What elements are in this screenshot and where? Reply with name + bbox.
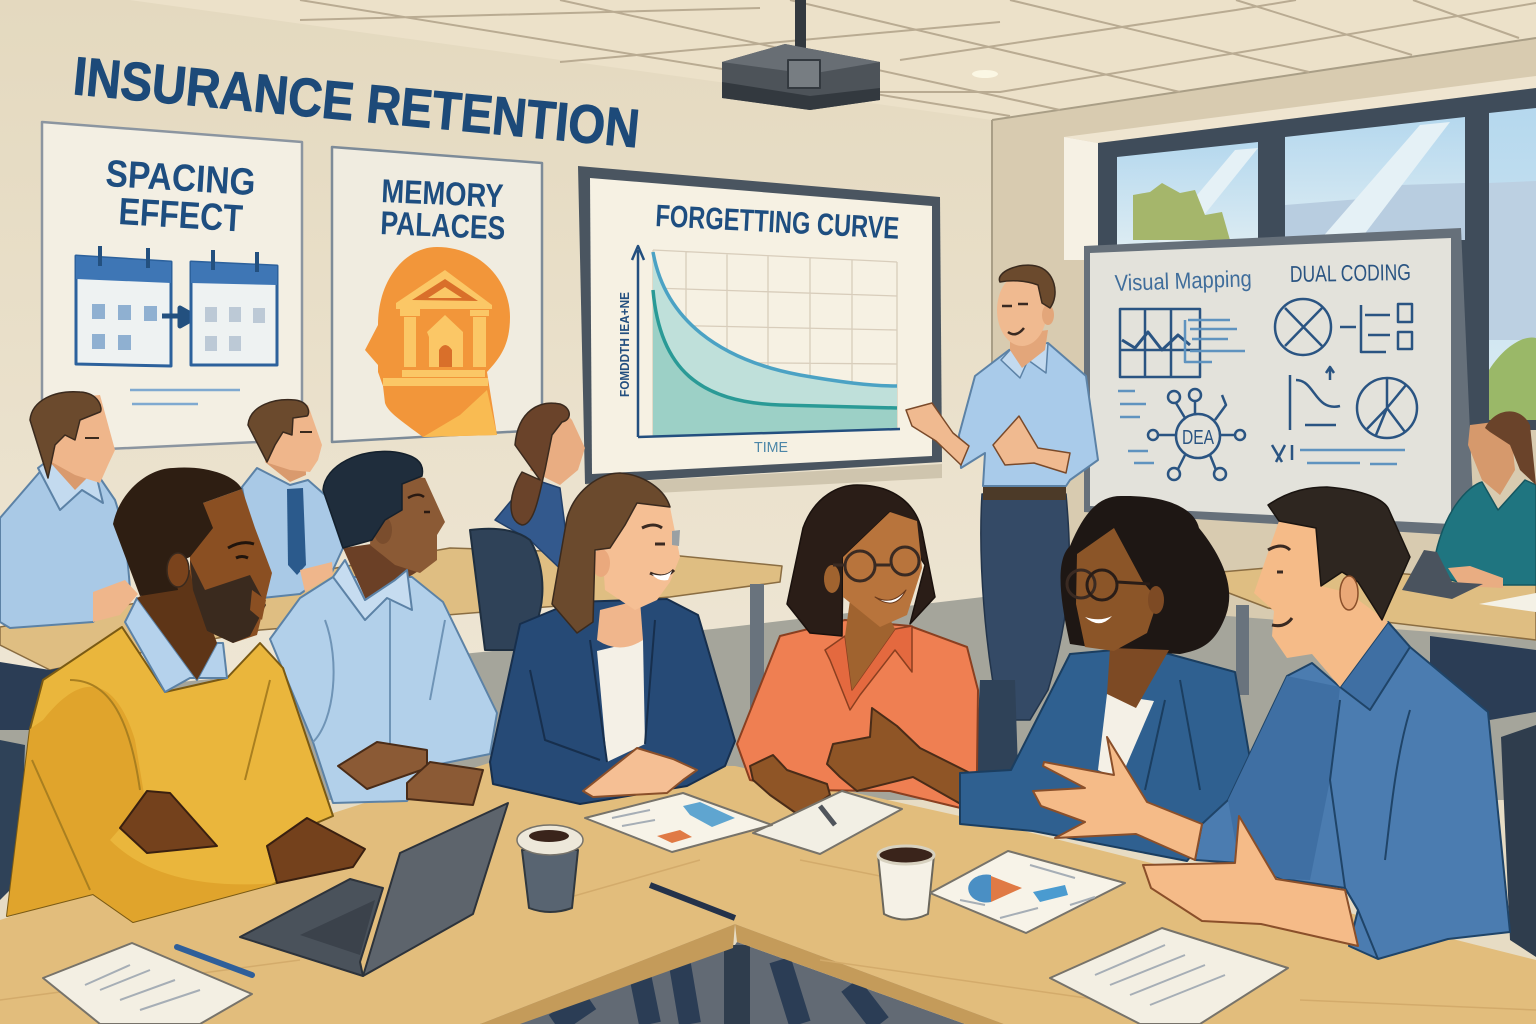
pen near paper	[177, 947, 252, 975]
collar	[1001, 343, 1048, 378]
caption lines	[130, 390, 240, 404]
heading: memory palaces: MEMORY	[381, 172, 504, 214]
poster: spacing effect	[42, 122, 302, 452]
heading: memory palaces: PALACES	[380, 204, 506, 246]
arrow between calendars	[162, 308, 196, 326]
x axis label: TIME	[754, 439, 788, 456]
document: centre chart	[585, 793, 772, 852]
heading: dual coding: DUAL CODING	[1290, 259, 1411, 287]
head	[1010, 330, 1048, 368]
sketches	[1118, 299, 1417, 480]
face	[1002, 304, 1028, 334]
neck	[137, 570, 217, 680]
person: woman in navy blazer	[490, 473, 735, 804]
ceiling light	[972, 70, 998, 78]
text on whiteboard: DEA	[1182, 427, 1215, 449]
person: man in light blue shirt	[270, 451, 497, 805]
heading: spacing effect: SPACING	[104, 153, 257, 204]
poster: memory palaces	[332, 147, 542, 442]
heading: forgetting curve: FORGETTING CURVE	[655, 198, 900, 246]
shirt	[1195, 622, 1510, 959]
belt	[983, 486, 1066, 500]
pen on table	[650, 885, 735, 918]
person: man in yellow sweater	[7, 467, 365, 922]
chart: forgetting curve	[617, 246, 900, 456]
collar	[1340, 622, 1410, 710]
heading: visual mapping: Visual Mapping	[1114, 265, 1252, 296]
coffee cup right	[878, 846, 934, 920]
heading: spacing effect	[104, 153, 257, 241]
foreground tables	[0, 762, 1536, 1024]
heading: memory palaces	[380, 172, 506, 246]
person: woman in blue blazer with curly hair	[960, 496, 1250, 861]
hands	[906, 403, 969, 465]
crossed hands	[120, 791, 217, 853]
paper on back right table	[1479, 593, 1536, 612]
projection screen	[578, 166, 942, 496]
icon: calendar one	[76, 246, 171, 366]
laptop on back right table	[1402, 550, 1483, 599]
window	[1098, 88, 1536, 430]
person: back row man left	[0, 392, 138, 628]
y axis label: FOMDDTH IEA+NE	[617, 292, 632, 397]
back tables	[0, 548, 1536, 730]
projector	[722, 0, 880, 110]
heading: spacing effect: EFFECT	[117, 191, 244, 241]
person: woman in orange shirt	[737, 485, 978, 816]
laptop	[240, 803, 508, 976]
trousers	[981, 494, 1069, 720]
document: text page bottom left	[43, 943, 252, 1024]
icon: head with palace	[365, 247, 510, 437]
person: right back woman	[1432, 411, 1536, 588]
head	[190, 489, 272, 643]
room background	[0, 0, 1536, 800]
person: presenter	[906, 265, 1098, 720]
document: pie chart	[930, 851, 1125, 933]
shirt	[959, 343, 1098, 486]
sweater	[7, 627, 333, 922]
coffee cup left	[517, 825, 583, 912]
document: notes	[753, 791, 902, 854]
whiteboard	[1084, 228, 1473, 535]
collar	[125, 598, 227, 692]
person: man in blue shirt	[1033, 487, 1510, 959]
icon: calendar two	[191, 250, 277, 365]
document: text page bottom right	[1050, 928, 1288, 1024]
person: back row man with tie	[242, 400, 343, 598]
person: back row woman	[495, 402, 585, 580]
pen in hand	[820, 806, 835, 825]
head	[1254, 521, 1388, 687]
title: INSURANCE RETENTION	[71, 46, 642, 159]
chairs	[0, 529, 1536, 957]
hands	[1033, 737, 1202, 860]
